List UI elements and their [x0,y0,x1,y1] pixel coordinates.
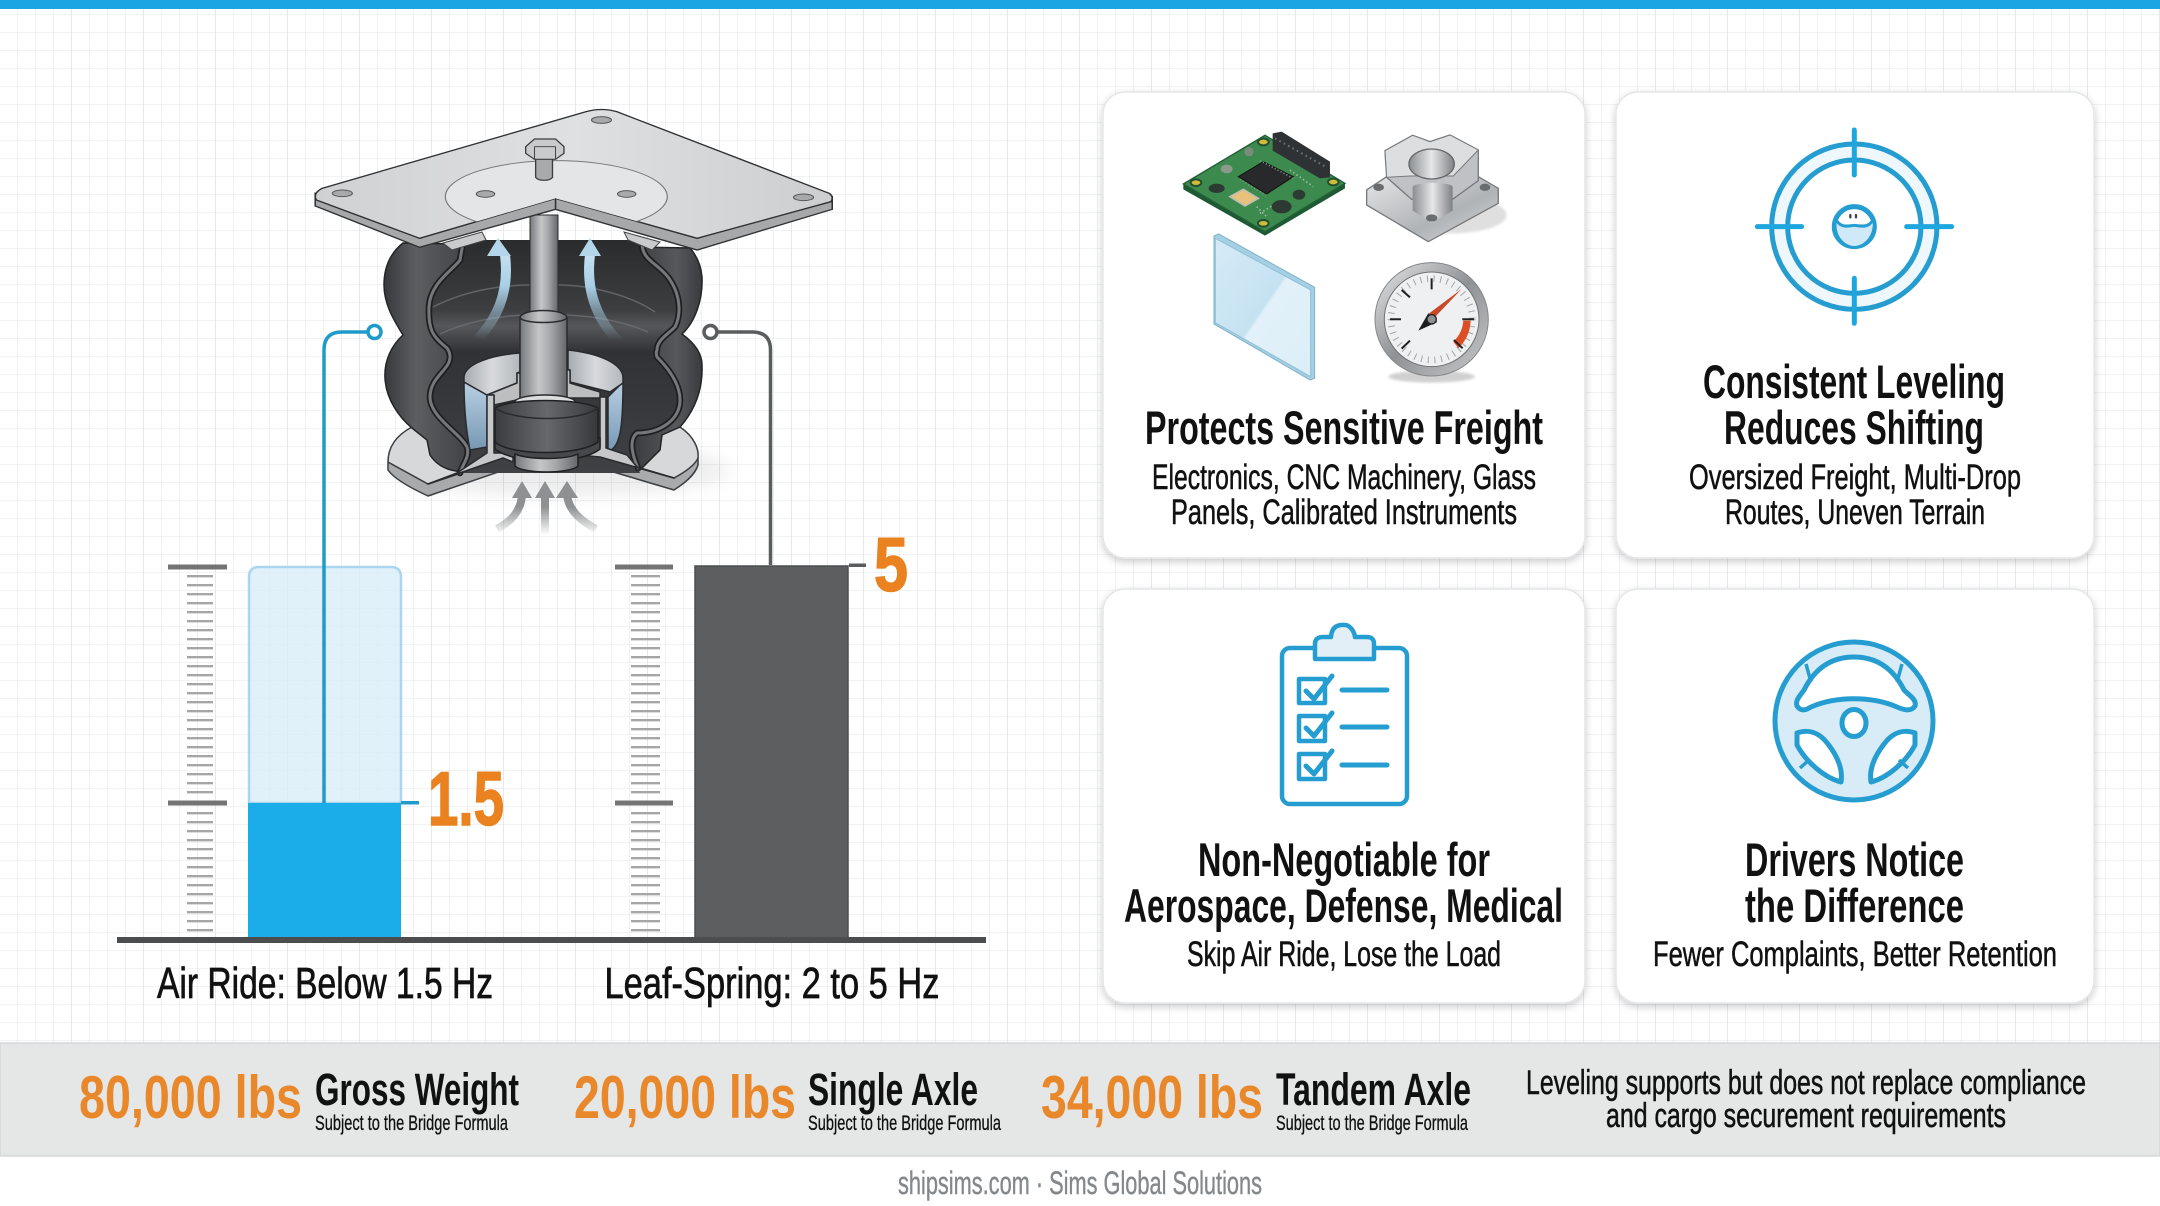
chart: vibration frequency bars [117,326,986,1008]
stat: gross weight [79,1064,519,1135]
description: Routes, Uneven Terrain [1725,493,1985,532]
heading [1745,833,1964,932]
leader marker: air ride [368,326,381,338]
stat: gross weight: 80,000 lbs [79,1064,302,1131]
panel: non-negotiable [1103,589,1585,1003]
description [1689,458,2021,532]
compliance note: and cargo securement requirements [1606,1097,2006,1135]
icon: clipboard checklist [1282,625,1407,804]
heading: Reduces Shifting [1724,401,1984,454]
dark damper puck [495,400,600,472]
heading: the Difference [1745,879,1964,932]
scale: air ride [168,564,227,932]
rising air arrows [478,238,618,341]
value tick: air ride [401,801,419,804]
top accent bar [0,0,2160,9]
value: 1.5: 1.5 [428,757,504,842]
compliance note [1526,1064,2086,1135]
stat: single axle: 20,000 lbs [574,1064,796,1131]
value tick: leaf spring [849,564,866,567]
top mounting plate [315,109,832,250]
rubber bellows [384,243,702,472]
bellows wall section [429,243,680,473]
icon: glass panel [1214,234,1315,380]
inlet air arrows [497,481,596,537]
heading: Non-Negotiable for [1198,833,1490,886]
heading [1124,833,1563,932]
bead clamp details [443,232,660,250]
interior fold highlights [433,285,655,334]
description: Electronics, CNC Machinery, Glass [1152,458,1536,497]
chart baseline [117,937,986,943]
stat: tandem axle: 34,000 lbs [1041,1064,1263,1131]
piston rod and collar [515,215,575,409]
label: leaf spring: Leaf-Spring: 2 to 5 Hz [604,959,940,1008]
stats band [0,1043,2160,1156]
panel: drivers notice [1616,589,2094,1003]
stat: single axle: Subject to the Bridge Formula [808,1112,1001,1135]
center bolt [526,139,564,180]
piston cutaway [428,350,674,484]
scale: leaf spring [615,564,673,932]
icon: machined block [1367,135,1507,242]
heading: Protects Sensitive Freight [1145,401,1543,454]
bottom mounting plate [388,420,698,496]
icon: circuit board [1183,132,1345,236]
label: air ride: Air Ride: Below 1.5 Hz [157,959,493,1008]
stat: tandem axle: Subject to the Bridge Formula [1276,1112,1468,1135]
heading: Drivers Notice [1745,833,1964,886]
stat: gross weight: Gross Weight [315,1064,519,1115]
panel: consistent leveling [1616,92,2094,558]
heading: Aerospace, Defense, Medical [1124,879,1563,932]
description: Skip Air Ride, Lose the Load [1187,935,1501,974]
stat: tandem axle: Tandem Axle [1276,1064,1471,1115]
stat: single axle [574,1064,1001,1135]
value: 5: 5 [874,523,908,608]
description: Oversized Freight, Multi-Drop [1689,458,2021,497]
leader marker: leaf spring [704,326,717,338]
panel: protects sensitive freight [1103,92,1585,558]
leader: air ride [324,332,367,803]
heading [1703,355,2005,454]
bellows interior [429,240,680,473]
bar: leaf spring value [695,566,848,940]
description [1152,458,1536,532]
icon: pressure gauge [1375,263,1488,383]
heading: Consistent Leveling [1703,355,2005,408]
description: Panels, Calibrated Instruments [1171,493,1517,532]
leader: leaf spring [718,332,770,565]
stat: single axle: Single Axle [808,1064,978,1115]
footer credit: shipsims.com · Sims Global Solutions [898,1165,1262,1201]
stat: gross weight: Subject to the Bridge Formula [315,1112,508,1135]
icon: steering wheel [1775,642,1933,800]
stat: tandem axle [1041,1064,1471,1135]
bar: air ride track [249,567,401,803]
bar: air ride value [248,803,401,940]
air spring cutaway illustration [315,109,832,537]
icon: target level [1757,130,1952,323]
